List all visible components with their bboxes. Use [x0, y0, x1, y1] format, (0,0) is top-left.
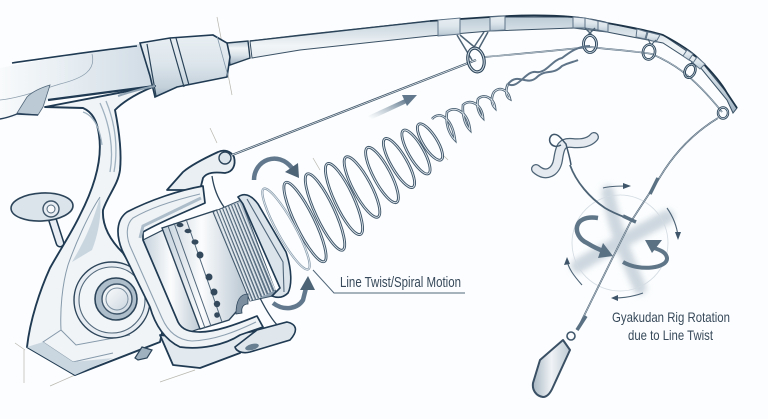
- wound line: [213, 200, 277, 301]
- leader line: [313, 270, 465, 293]
- large left curved arrow: [577, 218, 606, 252]
- stem shading: [72, 197, 101, 262]
- bail foot: [235, 322, 295, 353]
- rod guides: [457, 28, 728, 118]
- anti-reverse lever: [135, 347, 152, 360]
- bail arm: [118, 151, 295, 368]
- callout: line twist label: Line Twist/Spiral Motion: [340, 275, 461, 291]
- spiral line twist: [256, 46, 590, 274]
- sinker: [533, 340, 570, 397]
- rotor frame: [118, 186, 263, 348]
- reel seat wedge: [17, 85, 50, 115]
- handle knob: [10, 191, 74, 223]
- caption: gyakudan rig rotation: [612, 309, 730, 343]
- reel handle: [10, 191, 74, 243]
- arrow: rotation above spool: [254, 159, 299, 180]
- base facet: [27, 342, 113, 375]
- spool ports: [176, 223, 220, 318]
- line to tip: [577, 118, 718, 330]
- guide 2: [584, 28, 596, 52]
- rod blank: [250, 17, 737, 113]
- small orbit arrows: [567, 186, 678, 298]
- gyakudan rig: [533, 118, 718, 397]
- sinker eye: [567, 332, 575, 340]
- guide 3: [642, 39, 656, 60]
- notch: [236, 294, 248, 314]
- callout: line twist label: [313, 270, 465, 293]
- gear housing: [74, 262, 152, 360]
- coil outlines: [256, 120, 447, 274]
- reel stem: [27, 86, 165, 375]
- gear cap: [95, 278, 137, 320]
- upper swivel knot: [650, 178, 658, 194]
- front cylinder: [143, 228, 205, 333]
- rig arrows: [564, 183, 681, 301]
- leader: [570, 165, 632, 220]
- main fishing line: [232, 47, 722, 155]
- guide 1: [457, 32, 488, 73]
- worm: [536, 137, 594, 173]
- tip guide: [718, 108, 728, 118]
- butt ferrule: [227, 41, 250, 65]
- arrow: line direction: [369, 95, 417, 118]
- guide 4: [683, 62, 697, 79]
- caption: gyakudan rig rotation: due to Line Twist: [628, 327, 713, 343]
- line roller arm: [167, 151, 235, 190]
- fishing rod: [0, 16, 737, 119]
- handle: [0, 44, 155, 119]
- large right curved arrow: [623, 248, 667, 268]
- caption: gyakudan rig rotation: Gyakudan Rig Rotation: [612, 309, 730, 325]
- spool: [143, 195, 291, 333]
- rod top edge: [430, 16, 737, 108]
- mid knot: [623, 216, 636, 222]
- roller: [219, 152, 231, 164]
- blurred rotating rig: [578, 192, 667, 288]
- arrow: rotation below spool: [273, 276, 315, 308]
- lower rotor: [160, 330, 262, 368]
- rotation circle: [572, 195, 668, 291]
- twisted strands: [508, 46, 590, 85]
- bail wire: [212, 176, 279, 327]
- rear flange: [238, 195, 291, 297]
- coil highlights: [256, 120, 447, 274]
- lower knot: [577, 316, 586, 330]
- collar: [140, 35, 230, 97]
- rod wraps: [438, 16, 705, 69]
- ported ring: [162, 210, 250, 329]
- handle arm: [50, 212, 60, 243]
- hook loop: [550, 134, 571, 165]
- tightening loops: [432, 84, 510, 140]
